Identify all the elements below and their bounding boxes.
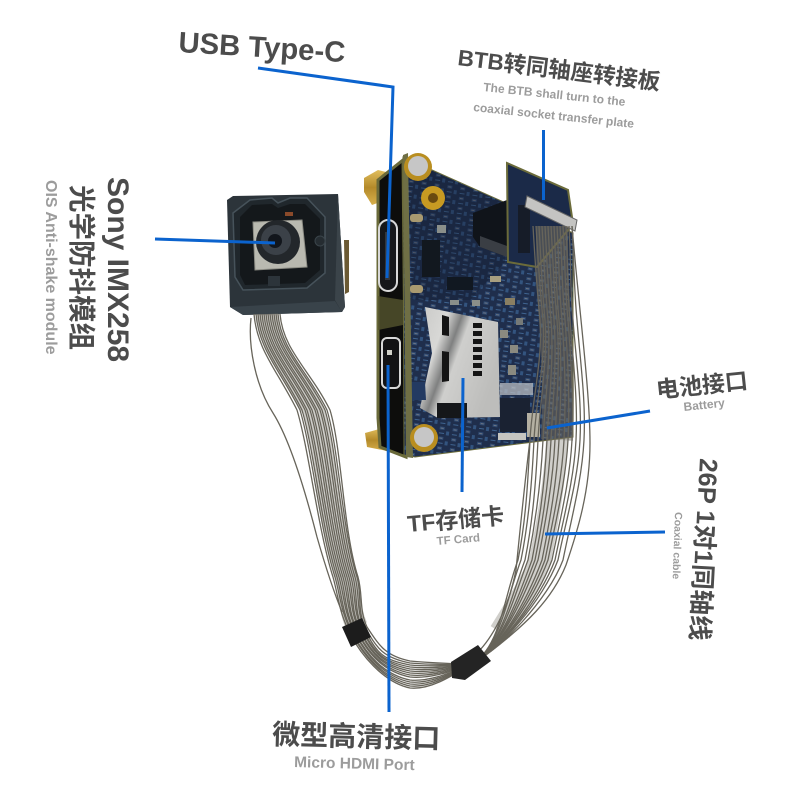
label: Sony IMX258 [42, 177, 134, 362]
leader line: battery [547, 411, 650, 428]
BTB connector [525, 196, 577, 231]
screws [404, 153, 445, 452]
label: Sony IMX258: Sony IMX258 [101, 177, 134, 362]
label: BTB adapter board: coaxial socket transfer plate [473, 100, 635, 131]
leader line: Micro HDMI [388, 365, 389, 712]
leader line: coaxial cable [545, 532, 665, 534]
label: coaxial cable: 26P 1对1同轴线 [684, 458, 722, 641]
label: BTB adapter board: BTB转同轴座转接板 [456, 44, 662, 95]
label: TF card: TF Card [436, 532, 481, 548]
TF card slot [412, 307, 500, 418]
label: Sony IMX258: OIS Anti-shake module [42, 180, 59, 355]
label: Sony IMX258: 光学防抖模组 [66, 185, 97, 350]
circuit board [364, 153, 573, 458]
USB-C port [379, 220, 397, 291]
label: Micro HDMI port: Micro HDMI Port [294, 754, 415, 774]
Micro HDMI port [382, 338, 400, 388]
leader line: USB Type-C [258, 68, 393, 278]
brass standoffs [364, 170, 392, 452]
side edge and rear plate [378, 160, 406, 457]
heat shrink sleeves [342, 618, 491, 680]
label: Micro HDMI port [272, 719, 441, 774]
label: USB Type-C: USB Type-C [178, 26, 346, 69]
coaxial wire bundle [250, 226, 590, 688]
label: battery connector: Battery [683, 396, 726, 414]
label: TF card: TF存储卡 [406, 503, 505, 537]
label: coaxial cable: Coaxial cable [670, 512, 684, 580]
leader line: BTB board [542, 130, 545, 200]
label: battery connector: 电池接口 [655, 367, 749, 403]
label: BTB adapter board [456, 44, 662, 131]
main pcb [403, 157, 573, 457]
leader line: TF card [462, 378, 463, 492]
BTB adapter board [507, 163, 577, 267]
label: BTB adapter board: The BTB shall turn to the [483, 80, 626, 109]
label: Micro HDMI port: 微型高清接口 [272, 719, 441, 754]
components [410, 200, 540, 440]
camera module [227, 194, 349, 315]
lens [256, 220, 300, 264]
leader line: Sony IMX258 [155, 239, 275, 243]
